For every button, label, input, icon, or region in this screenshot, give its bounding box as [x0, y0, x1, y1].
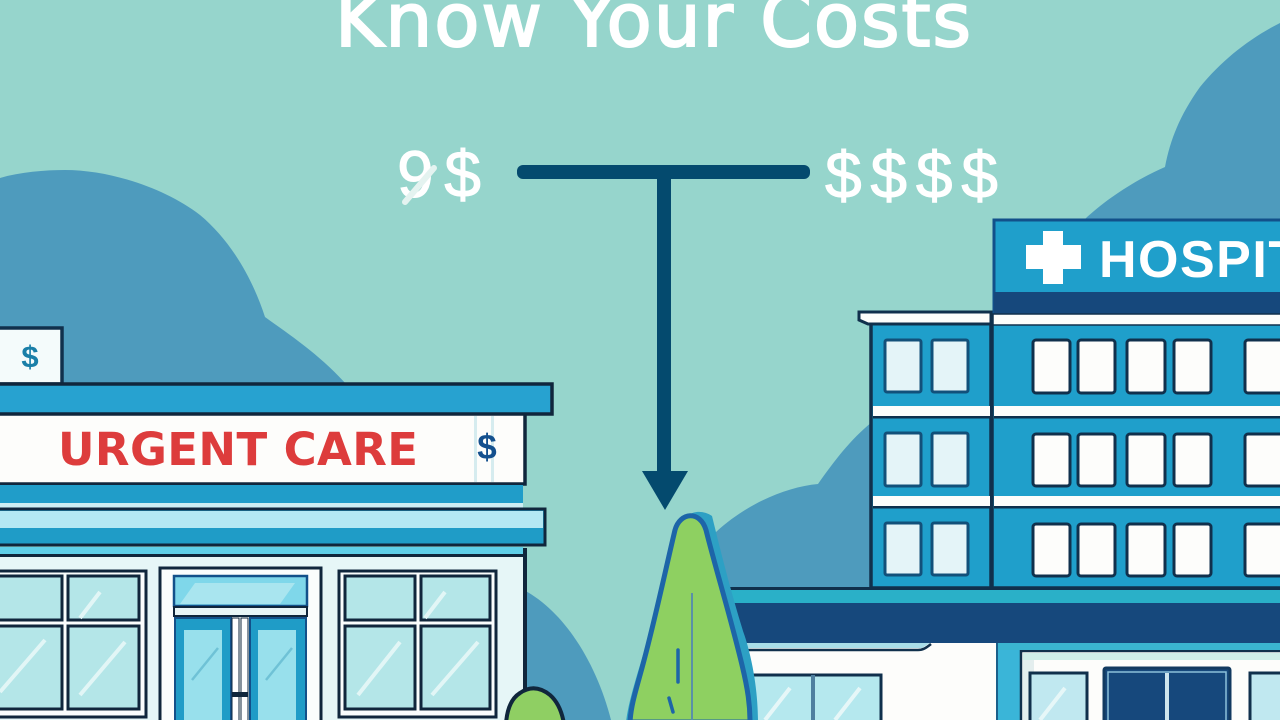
cost scale: high cost symbol: $$$$: [825, 138, 998, 212]
cost scale: low cost symbol: 9$: [397, 137, 481, 211]
windows: main tower: [1033, 340, 1280, 576]
roof band: [0, 384, 552, 414]
tree: [626, 512, 758, 720]
door: entrance: [160, 568, 321, 720]
windows: side wing: [885, 340, 968, 575]
door: hospital entrance: [1104, 668, 1230, 720]
ground floor wall: [735, 643, 1280, 720]
sign: urgent care: URGENT CARE: [58, 423, 418, 476]
sign: urgent care: $: [477, 428, 497, 467]
main tower: [992, 314, 1280, 588]
sign: urgent care: [0, 412, 525, 484]
background hill: upper right: [1085, 23, 1280, 260]
icon: medical cross: [1026, 231, 1081, 284]
fascia band: [0, 485, 523, 509]
window: ground floor centre: [1030, 673, 1087, 720]
side wing: [859, 312, 991, 588]
sign: hospital: [994, 220, 1280, 314]
canopy: [726, 587, 1280, 650]
hospital building: [726, 220, 1280, 720]
awning: [0, 509, 545, 557]
urgent care building: [0, 328, 564, 720]
sign: small dollar tag: [0, 328, 62, 384]
wall: urgent care facade: [0, 550, 525, 720]
background hill: centre: [520, 588, 611, 720]
window: left storefront: [0, 571, 146, 717]
background hill: lower right: [716, 422, 880, 600]
arrow: cost scale pointing down: [517, 165, 810, 510]
sign: small dollar tag: $: [21, 339, 39, 374]
bush: [506, 688, 564, 720]
window: right storefront: [339, 571, 496, 717]
window: ground floor left: [751, 675, 881, 720]
background hill: left: [0, 170, 346, 420]
window: ground floor right: [1250, 673, 1280, 720]
